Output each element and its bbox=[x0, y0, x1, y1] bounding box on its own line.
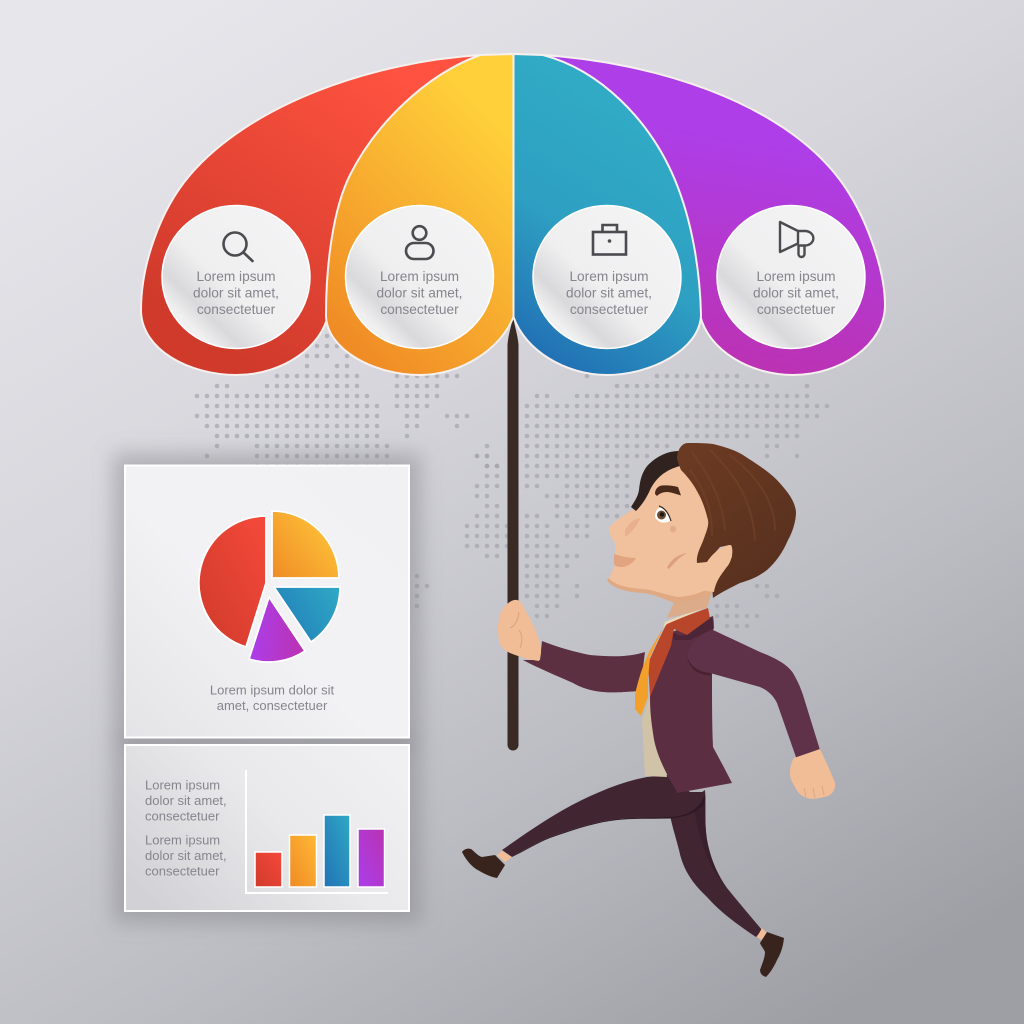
man running bbox=[462, 443, 835, 977]
card text: megaphone: dolor sit amet, bbox=[753, 285, 839, 300]
card text: briefcase: dolor sit amet, bbox=[566, 285, 652, 300]
shirt bbox=[642, 697, 667, 777]
hand: holding pole bbox=[498, 600, 541, 661]
front leg bbox=[502, 775, 705, 857]
card text: person: Lorem ipsum bbox=[380, 269, 459, 284]
icon: person bbox=[406, 226, 434, 259]
eyebrow bbox=[655, 485, 681, 496]
ankles bbox=[497, 851, 767, 941]
card text: search: dolor sit amet, bbox=[193, 285, 279, 300]
segment: yellow bbox=[326, 54, 514, 375]
mouth bbox=[614, 554, 636, 567]
bar chart text: Lorem ipsum bbox=[145, 778, 220, 792]
pie caption: amet, consectetuer bbox=[217, 698, 328, 713]
right arm shade bbox=[687, 655, 712, 675]
cheek line bbox=[667, 553, 687, 569]
shoe: right bbox=[760, 932, 784, 977]
hand finger lines bbox=[510, 612, 522, 648]
card: briefcase bbox=[533, 206, 681, 348]
card: megaphone bbox=[717, 206, 865, 348]
segment: purple bbox=[513, 54, 885, 375]
hair: brown bbox=[677, 443, 796, 598]
hand knuckle lines bbox=[804, 786, 824, 798]
icon: magnifier bbox=[224, 232, 252, 261]
collar edge bbox=[663, 608, 705, 628]
face bbox=[609, 463, 716, 597]
nose shade bbox=[625, 518, 640, 537]
card text: megaphone: consectetuer bbox=[757, 302, 836, 317]
segment: blue bbox=[514, 54, 701, 375]
card text: search: consectetuer bbox=[197, 302, 276, 317]
shoe: left bbox=[462, 849, 505, 878]
bar chart bbox=[246, 770, 388, 893]
card text: megaphone: Lorem ipsum bbox=[756, 269, 836, 284]
dotted world map bbox=[197, 336, 828, 626]
ear bbox=[700, 545, 732, 592]
icon: megaphone bbox=[780, 222, 813, 257]
right arm bbox=[687, 630, 820, 760]
bar chart text: consectetuer bbox=[145, 808, 220, 823]
segment: red bbox=[141, 54, 513, 375]
card text: search: Lorem ipsum bbox=[196, 269, 276, 284]
pie caption: Lorem ipsum dolor sit bbox=[210, 682, 334, 698]
card: search bbox=[162, 206, 310, 348]
bar chart text: dolor sit amet, bbox=[145, 848, 227, 863]
eye bbox=[655, 506, 676, 532]
panel: pie chart bbox=[125, 466, 409, 738]
tie bbox=[635, 628, 663, 716]
card: person bbox=[346, 206, 494, 348]
umbrella canopy bbox=[141, 54, 885, 375]
panel: bar chart bbox=[125, 745, 409, 911]
bar chart text: dolor sit amet, bbox=[145, 793, 227, 808]
hair strands bbox=[690, 450, 775, 540]
pie chart bbox=[199, 511, 340, 662]
back leg bbox=[670, 790, 762, 937]
hand: free bbox=[790, 749, 835, 799]
left arm bbox=[523, 641, 645, 692]
icon: briefcase bbox=[593, 225, 626, 254]
panel shadows bbox=[113, 453, 421, 923]
bar chart text: Lorem ipsum bbox=[145, 833, 220, 848]
card text: person: dolor sit amet, bbox=[377, 285, 462, 300]
bar chart text: consectetuer bbox=[145, 864, 220, 878]
hair: dark front bbox=[631, 451, 680, 511]
neck bbox=[667, 588, 713, 618]
jaw shadow bbox=[607, 570, 716, 603]
collar bbox=[648, 608, 710, 697]
card text: person: consectetuer bbox=[380, 302, 459, 317]
umbrella pole bbox=[508, 315, 518, 750]
card text: briefcase: Lorem ipsum bbox=[569, 269, 649, 284]
card text: briefcase: consectetuer bbox=[570, 302, 649, 317]
lapel shade bbox=[672, 618, 714, 640]
jacket body bbox=[650, 616, 732, 793]
